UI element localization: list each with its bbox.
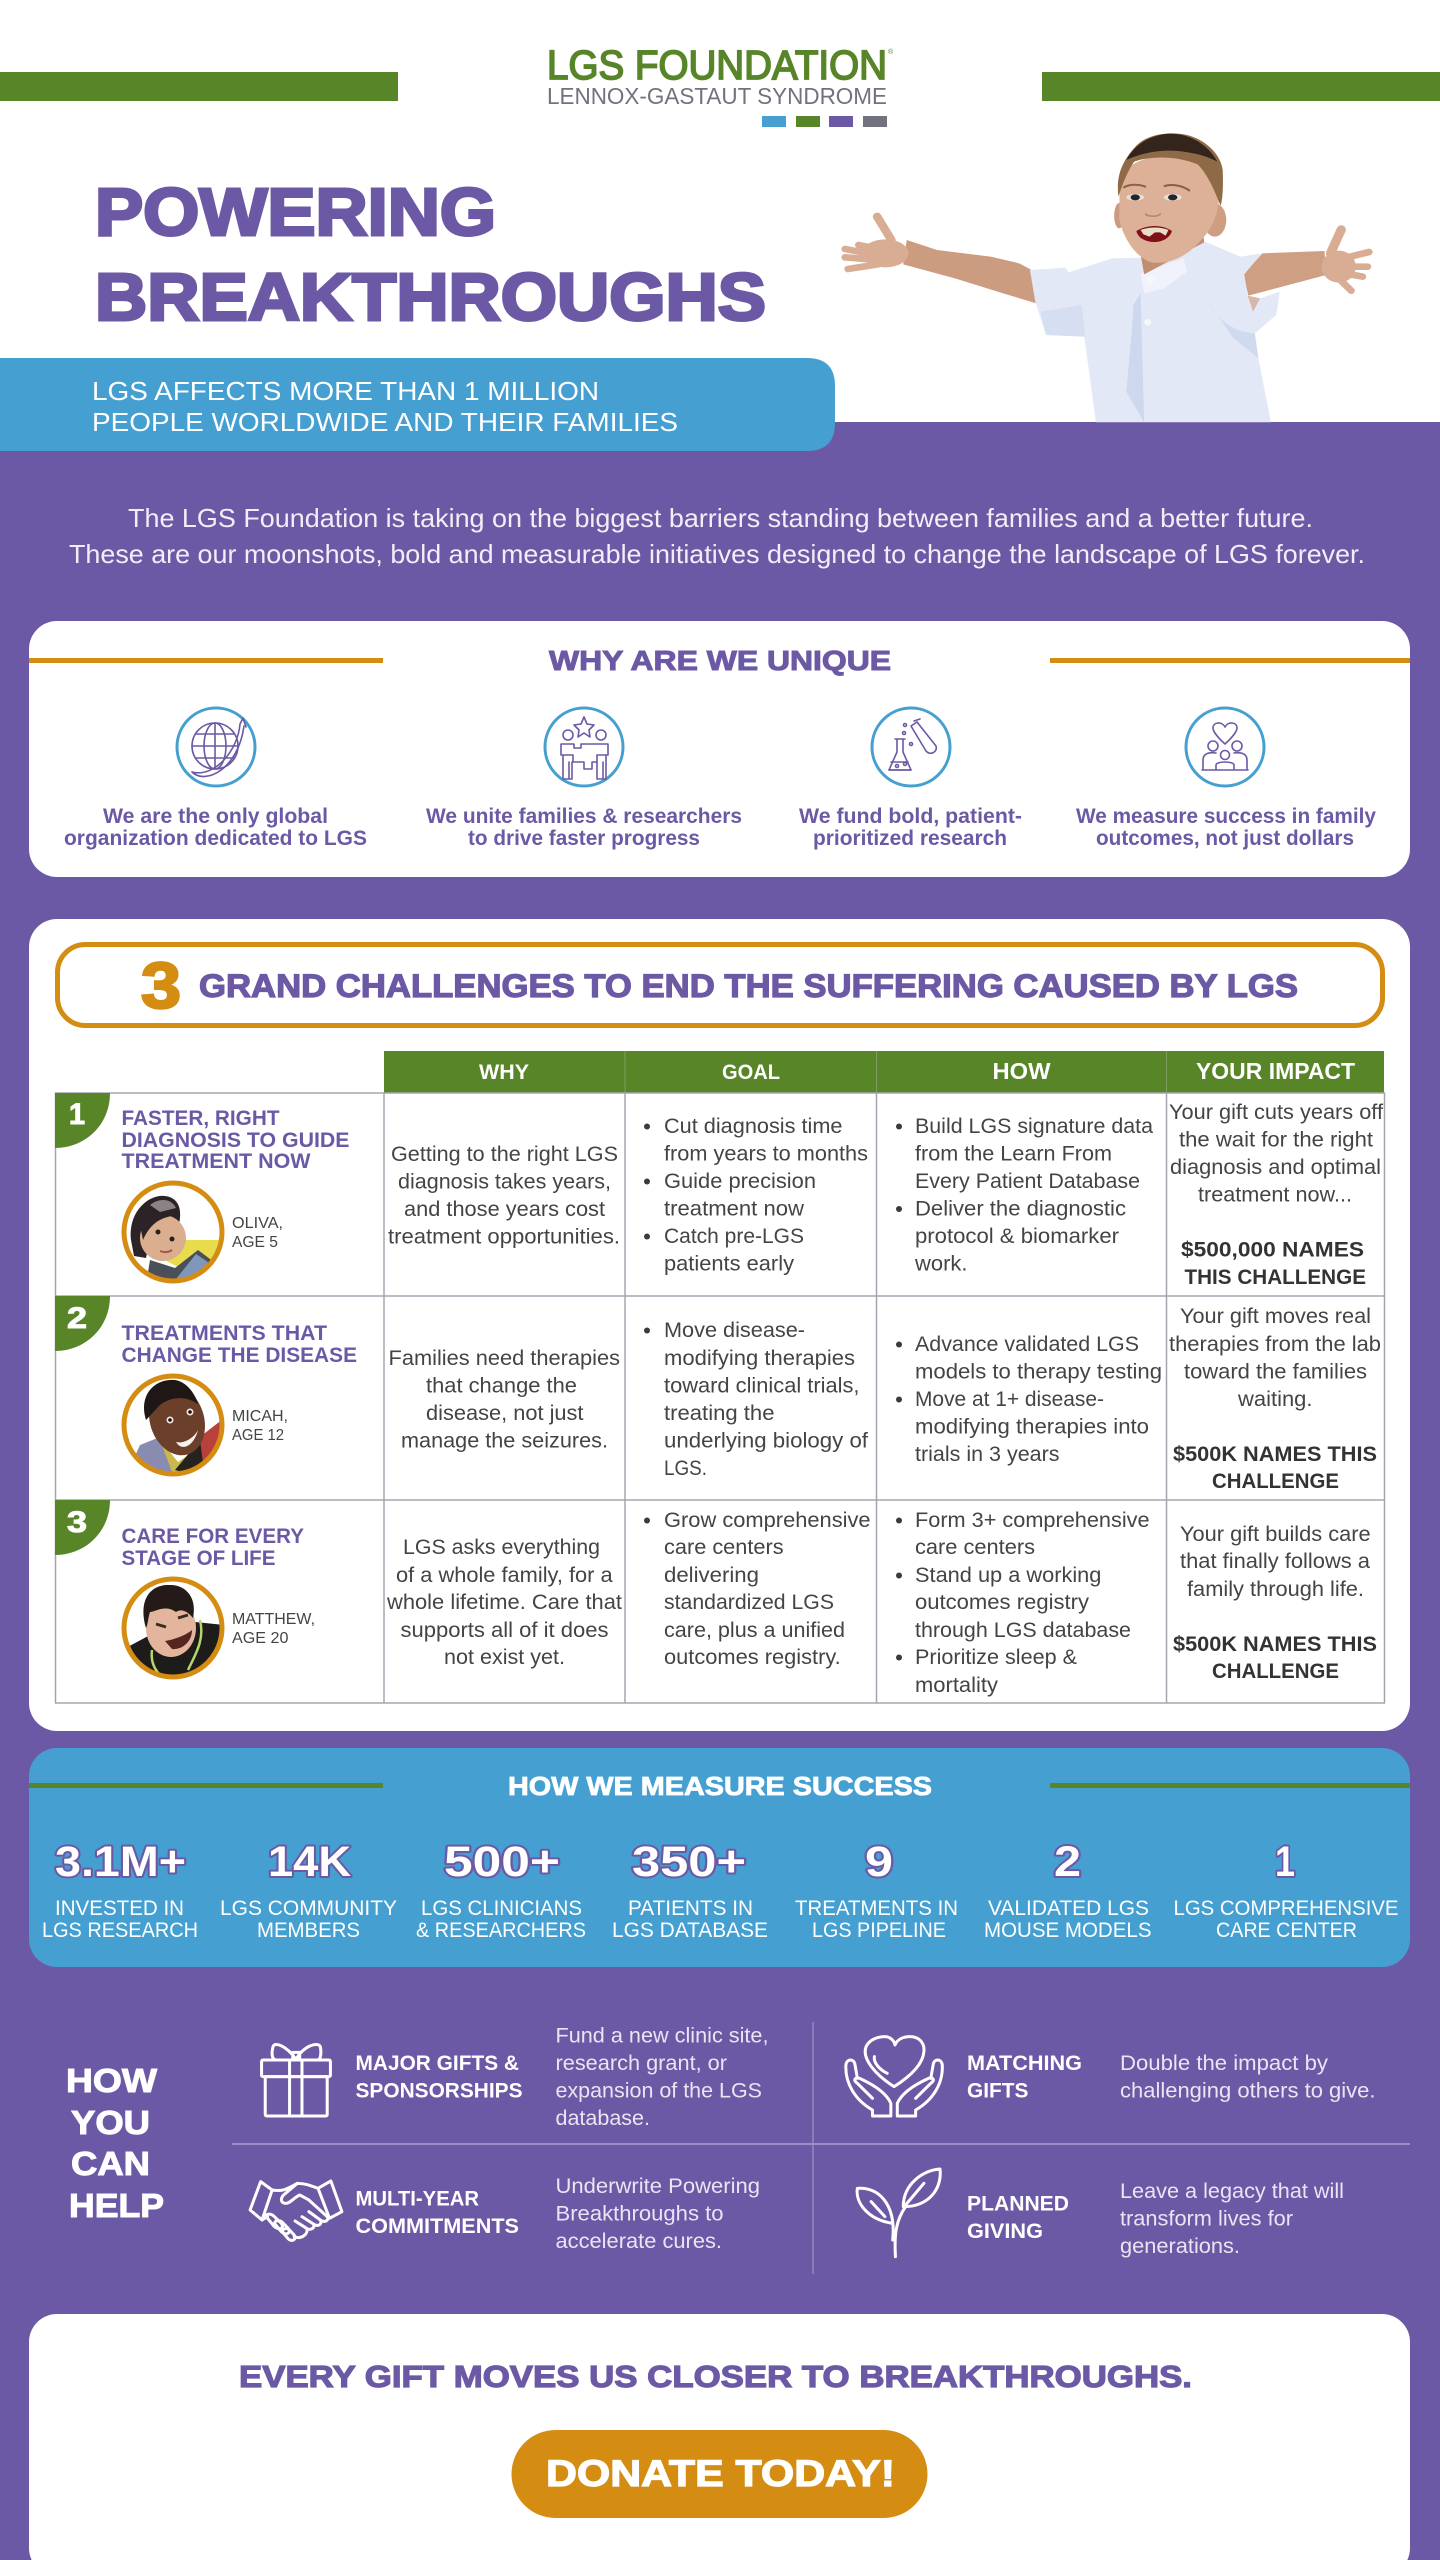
text: planned giving description: transform lives for: [1120, 2208, 1293, 2230]
row 2 impact: $500K NAMES THIS: [1173, 1443, 1377, 1466]
table header: GOAL: [722, 1061, 780, 1084]
logo: [547, 42, 894, 127]
text: planned giving label: PLANNED: [967, 2192, 1069, 2216]
name: Oliva: AGE 5: [232, 1234, 278, 1251]
row 1: [55, 1093, 1383, 1290]
row 1 why: Getting to the right LGS: [391, 1143, 618, 1166]
panel: grand challenges: [29, 919, 1410, 1731]
table header: YOUR IMPACT: [1196, 1058, 1355, 1084]
row 1 how: Build LGS signature data: [915, 1115, 1153, 1138]
text: multi-year label: [356, 2188, 519, 2238]
row 3 why: whole lifetime. Care that: [386, 1591, 622, 1614]
row 2 title: [122, 1322, 357, 1367]
button: donate today: [512, 2430, 928, 2518]
icon: people with puzzle: [545, 708, 623, 786]
row 1 goal: treatment now: [664, 1198, 805, 1220]
row 3 how: care centers: [915, 1536, 1035, 1559]
row 1 title: DIAGNOSIS TO GUIDE: [122, 1129, 350, 1152]
text: multi-year description: Breakthroughs to: [556, 2202, 724, 2226]
title: BREAKTHROUGHS: [95, 260, 766, 335]
text: major gifts description: [556, 2024, 768, 2130]
row 1 impact: $500,000 NAMES: [1181, 1238, 1364, 1262]
text: multi-year description: accelerate cures.: [556, 2230, 722, 2253]
intro paragraph: These are our moonshots, bold and measurable initiatives designed to change the landscape of LGS forever.: [69, 539, 1365, 569]
row 2 how: trials in 3 years: [915, 1443, 1060, 1466]
text: matching gifts description: [1120, 2052, 1376, 2102]
text: unite families and researchers: [426, 805, 742, 850]
name: Matthew: MATTHEW,: [232, 1611, 315, 1628]
stat: clinicians: LGS CLINICIANS: [421, 1897, 582, 1920]
heading box: 3 grand challenges: GRAND CHALLENGES TO END THE SUFFERING CAUSED BY LGS: [199, 968, 1298, 1004]
row 1 how: protocol & biomarker: [915, 1225, 1119, 1248]
row 3 impact: $500K NAMES THIS: [1173, 1633, 1377, 1656]
banner: LGS affects: [0, 358, 835, 451]
text: multi-year label: MULTI-YEAR: [356, 2188, 479, 2210]
row 2 why: that change the: [426, 1374, 577, 1398]
text: only global organization: [64, 805, 367, 850]
row 3 how: through LGS database: [915, 1619, 1131, 1642]
row 3 goal: Grow comprehensive: [664, 1509, 871, 1532]
row 3 goal: outcomes registry.: [664, 1646, 841, 1669]
heading: how you can help: YOU: [71, 2104, 150, 2141]
row 2 goal: [644, 1319, 868, 1480]
row 3: [55, 1500, 1377, 1697]
row 3 why: supports all of it does: [400, 1619, 608, 1642]
stat: community: MEMBERS: [257, 1919, 360, 1942]
row 1 impact: [1169, 1101, 1383, 1289]
row 3 impact: Your gift builds care: [1180, 1523, 1371, 1546]
intro paragraph: [69, 503, 1365, 569]
photo: boy with open arms: [845, 133, 1369, 422]
row 2 goal: Move disease-: [664, 1319, 805, 1342]
hair: [1118, 133, 1223, 206]
row 3 goal: delivering: [664, 1564, 759, 1587]
text: multi-year description: [556, 2175, 760, 2253]
row 3 why: of a whole family, for a: [396, 1564, 613, 1587]
text: matching gifts label: MATCHING: [967, 2052, 1082, 2075]
stat: clinicians: & RESEARCHERS: [416, 1919, 586, 1942]
row 3 impact: that finally follows a: [1180, 1550, 1370, 1573]
row 2 impact: toward the families: [1184, 1360, 1367, 1384]
row 3: 3: [67, 1506, 87, 1539]
logo: ®: [888, 48, 894, 56]
stat: treatments: 9: [865, 1838, 893, 1886]
row 2 how: Advance validated LGS: [915, 1333, 1139, 1356]
stat: invested: 3.1M+: [55, 1838, 186, 1886]
row 1 goal: Guide precision: [664, 1170, 816, 1193]
stat: clinicians: [416, 1838, 586, 1942]
banner: LGS affects: LGS AFFECTS MORE THAN 1 MILLION: [92, 376, 599, 406]
stat: mouse models: MOUSE MODELS: [984, 1919, 1152, 1942]
row 1 why: [388, 1143, 620, 1248]
row 3 why: [386, 1536, 622, 1669]
row 1 goal: from years to months: [664, 1142, 868, 1166]
row 1 goal: Cut diagnosis time: [664, 1115, 842, 1138]
logo: LGS FOUNDATION: [547, 42, 887, 88]
text: planned giving description: generations.: [1120, 2235, 1240, 2258]
row 1 goal: Catch pre-LGS: [664, 1225, 804, 1248]
stat: mouse models: 2: [1054, 1838, 1081, 1886]
text: major gifts label: SPONSORSHIPS: [356, 2080, 522, 2102]
right arm and hand: [1243, 230, 1369, 296]
name: Matthew: AGE 20: [232, 1630, 289, 1647]
text: major gifts description: expansion of the LGS: [556, 2080, 762, 2102]
text: matching gifts label: [967, 2052, 1082, 2102]
icon: family and heart: [1186, 708, 1264, 786]
row 1 how: [896, 1115, 1153, 1276]
title: POWERING: [95, 175, 496, 250]
name: Micah: MICAH,: [232, 1408, 288, 1425]
portrait: Matthew: [120, 1579, 225, 1685]
heading box: 3 grand challenges: 3: [141, 949, 181, 1022]
row 2 why: manage the seizures.: [401, 1430, 608, 1452]
row 1 impact: treatment now...: [1198, 1184, 1352, 1206]
row 3 impact: CHALLENGE: [1212, 1660, 1339, 1683]
row 1: 1: [69, 1098, 85, 1131]
text: planned giving label: GIVING: [967, 2220, 1043, 2243]
stat: patients: 350+: [632, 1838, 746, 1886]
text: planned giving description: [1120, 2180, 1344, 2258]
text: planned giving description: Leave a legacy that will: [1120, 2180, 1344, 2203]
row 1 goal: [644, 1115, 868, 1276]
intro paragraph: The LGS Foundation is taking on the biggest barriers standing between families and a better future.: [128, 503, 1313, 533]
stat: clinicians: 500+: [444, 1838, 560, 1886]
name: Micah: [232, 1408, 288, 1444]
table header: WHY: [479, 1061, 529, 1084]
text: measure success: outcomes, not just dollars: [1096, 827, 1354, 850]
stat: care center: LGS COMPREHENSIVE: [1174, 1897, 1398, 1920]
row 3 title: STAGE OF LIFE: [122, 1547, 276, 1570]
row 2 impact: waiting.: [1237, 1388, 1312, 1411]
face: [1119, 156, 1219, 263]
row 1 why: diagnosis takes years,: [398, 1170, 611, 1194]
row 2 goal: underlying biology of: [664, 1430, 868, 1452]
heading: every gift: EVERY GIFT MOVES US CLOSER TO BREAKTHROUGHS.: [239, 2359, 1192, 2394]
row 3 how: mortality: [915, 1674, 999, 1697]
nose: [1146, 213, 1160, 216]
name: Micah: AGE 12: [232, 1427, 284, 1444]
icon: globe: [177, 708, 255, 786]
stat: treatments: TREATMENTS IN: [795, 1897, 958, 1920]
row 2 how: modifying therapies into: [915, 1416, 1149, 1438]
row 2 how: models to therapy testing: [915, 1360, 1162, 1384]
text: multi-year label: COMMITMENTS: [356, 2215, 519, 2238]
row 3 impact: family through life.: [1187, 1578, 1364, 1601]
row 2 goal: LGS.: [664, 1457, 707, 1480]
row 3 why: LGS asks everything: [403, 1536, 600, 1559]
table header: HOW: [992, 1058, 1051, 1084]
text: major gifts description: research grant, or: [556, 2052, 727, 2075]
row 2 why: Families need therapies: [388, 1347, 620, 1370]
heading: how you can help: [66, 2062, 164, 2224]
row 2 title: TREATMENTS THAT: [122, 1322, 327, 1345]
row 2: [55, 1296, 1381, 1493]
text: major gifts label: [356, 2052, 522, 2102]
text: multi-year description: Underwrite Powering: [556, 2175, 760, 2198]
row 2 why: [388, 1347, 620, 1452]
panel: how we measure success: [29, 1748, 1410, 1967]
table header: [384, 1051, 1384, 1093]
text: unite families and researchers: We unite families & researchers: [426, 805, 742, 828]
row 2 impact: therapies from the lab: [1169, 1333, 1381, 1356]
stat: patients: LGS DATABASE: [612, 1919, 768, 1942]
stat: treatments: [795, 1838, 958, 1942]
row 3 how: Stand up a working: [915, 1564, 1101, 1587]
stat: community: LGS COMMUNITY: [220, 1897, 397, 1920]
text: matching gifts description: challenging others to give.: [1120, 2080, 1376, 2102]
heading: how you can help: HELP: [69, 2187, 164, 2224]
row 1 how: work.: [914, 1252, 968, 1276]
text: fund bold research: [799, 805, 1022, 850]
heading: why are we unique: WHY ARE WE UNIQUE: [549, 645, 891, 676]
stat: care center: [1174, 1838, 1398, 1942]
smile: [1136, 226, 1172, 242]
text: unite families and researchers: to drive faster progress: [468, 827, 700, 850]
text: measure success: We measure success in family: [1076, 805, 1376, 828]
heading: how you can help: HOW: [66, 2062, 158, 2099]
row 3 how: Prioritize sleep &: [915, 1646, 1077, 1669]
row 2 how: Move at 1+ disease-: [915, 1388, 1104, 1411]
heading box: 3 grand challenges: [58, 944, 1382, 1026]
row 1 impact: Your gift cuts years off: [1169, 1101, 1383, 1124]
heading: how you can help: CAN: [71, 2145, 150, 2182]
row 3 goal: standardized LGS: [664, 1591, 834, 1614]
panel: call to action: [29, 2314, 1410, 2560]
name: Oliva: OLIVA,: [232, 1215, 283, 1232]
row 2 why: disease, not just: [426, 1402, 584, 1425]
header bar: left: [0, 72, 398, 101]
text: major gifts description: Fund a new clinic site,: [556, 2024, 768, 2048]
text: planned giving label: [967, 2192, 1069, 2243]
row 1 impact: the wait for the right: [1179, 1128, 1373, 1152]
row 3 goal: care, plus a unified: [664, 1619, 845, 1642]
row 3 goal: care centers: [664, 1536, 784, 1559]
row 3 title: CARE FOR EVERY: [122, 1525, 304, 1548]
text: fund bold research: prioritized research: [813, 827, 1007, 850]
row 1 title: TREATMENT NOW: [122, 1150, 311, 1173]
text: only global organization: We are the only global: [103, 805, 328, 828]
portrait: Oliva: [124, 1183, 222, 1290]
stat: mouse models: [984, 1838, 1152, 1942]
row 3 how: [896, 1509, 1150, 1697]
row 2 impact: CHALLENGE: [1212, 1470, 1339, 1493]
row 1 why: and those years cost: [404, 1198, 605, 1221]
icon: flask and test tube: [872, 708, 950, 786]
stat: patients: PATIENTS IN: [628, 1897, 753, 1920]
neck: [1141, 232, 1204, 274]
row 1 title: [122, 1107, 350, 1173]
row 3 goal: [644, 1509, 871, 1669]
stat: treatments: LGS PIPELINE: [812, 1919, 946, 1942]
icon: plant: [857, 2169, 940, 2257]
stat: care center: 1: [1275, 1838, 1295, 1886]
text: matching gifts description: Double the impact by: [1120, 2052, 1329, 2075]
heading: how we measure success: HOW WE MEASURE SUCCESS: [508, 1771, 932, 1801]
row 3 how: outcomes registry: [915, 1591, 1090, 1614]
row 1 title: FASTER, RIGHT: [122, 1107, 280, 1130]
row 2 goal: modifying therapies: [664, 1347, 855, 1370]
row 2 impact: Your gift moves real: [1180, 1305, 1371, 1328]
stat: community: 14K: [268, 1838, 351, 1886]
text: major gifts label: MAJOR GIFTS &: [356, 2052, 519, 2075]
name: Oliva: [232, 1215, 283, 1251]
stat: invested: [42, 1838, 198, 1942]
name: Matthew: [232, 1611, 315, 1647]
stat: invested: INVESTED IN: [55, 1897, 184, 1920]
stat: mouse models: VALIDATED LGS: [988, 1897, 1149, 1920]
stat: invested: LGS RESEARCH: [42, 1919, 198, 1942]
row 2 goal: treating the: [664, 1402, 774, 1425]
row 2 title: CHANGE THE DISEASE: [122, 1344, 357, 1367]
stat: patients: [612, 1838, 768, 1942]
text: fund bold research: We fund bold, patient-: [799, 805, 1022, 828]
text: measure success: [1076, 805, 1376, 850]
eyebrows and eyes: [1123, 185, 1190, 191]
row 1 impact: THIS CHALLENGE: [1184, 1266, 1366, 1289]
stat: community: [220, 1838, 397, 1942]
icon: handshake: [250, 2181, 342, 2240]
title: [95, 175, 766, 335]
row 3 why: not exist yet.: [444, 1646, 565, 1669]
row 1 how: from the Learn From: [915, 1142, 1112, 1166]
button: donate today: DONATE TODAY!: [546, 2453, 895, 2494]
header bar: right: [1042, 72, 1440, 101]
ears: [1114, 203, 1124, 228]
panel: why are we unique: [29, 621, 1410, 877]
banner: LGS affects: PEOPLE WORLDWIDE AND THEIR FAMILIES: [92, 407, 678, 437]
portrait: Micah: [124, 1376, 228, 1480]
text: major gifts description: database.: [556, 2107, 650, 2130]
icon: gift: [262, 2044, 330, 2116]
row 1 goal: patients early: [664, 1252, 795, 1276]
icon: hands holding heart: [846, 2037, 942, 2116]
shirt: [1030, 242, 1280, 422]
row 2 impact: [1169, 1305, 1381, 1493]
row 2: 2: [67, 1302, 87, 1335]
row 3 how: Form 3+ comprehensive: [915, 1509, 1150, 1532]
logo: LENNOX-GASTAUT SYNDROME: [547, 83, 887, 109]
text: matching gifts label: GIFTS: [967, 2080, 1028, 2102]
row 2 how: [896, 1333, 1162, 1466]
row 1 how: Every Patient Database: [915, 1170, 1140, 1193]
row 3 title: [122, 1525, 304, 1570]
row 1 impact: diagnosis and optimal: [1170, 1156, 1381, 1179]
row 1 why: treatment opportunities.: [388, 1226, 620, 1248]
row 3 impact: [1173, 1523, 1377, 1683]
text: only global organization: organization dedicated to LGS: [64, 827, 367, 850]
stat: care center: CARE CENTER: [1216, 1919, 1357, 1942]
row 2 goal: toward clinical trials,: [664, 1374, 860, 1398]
row 1 how: Deliver the diagnostic: [915, 1198, 1126, 1220]
left arm and hand: [845, 217, 1036, 303]
